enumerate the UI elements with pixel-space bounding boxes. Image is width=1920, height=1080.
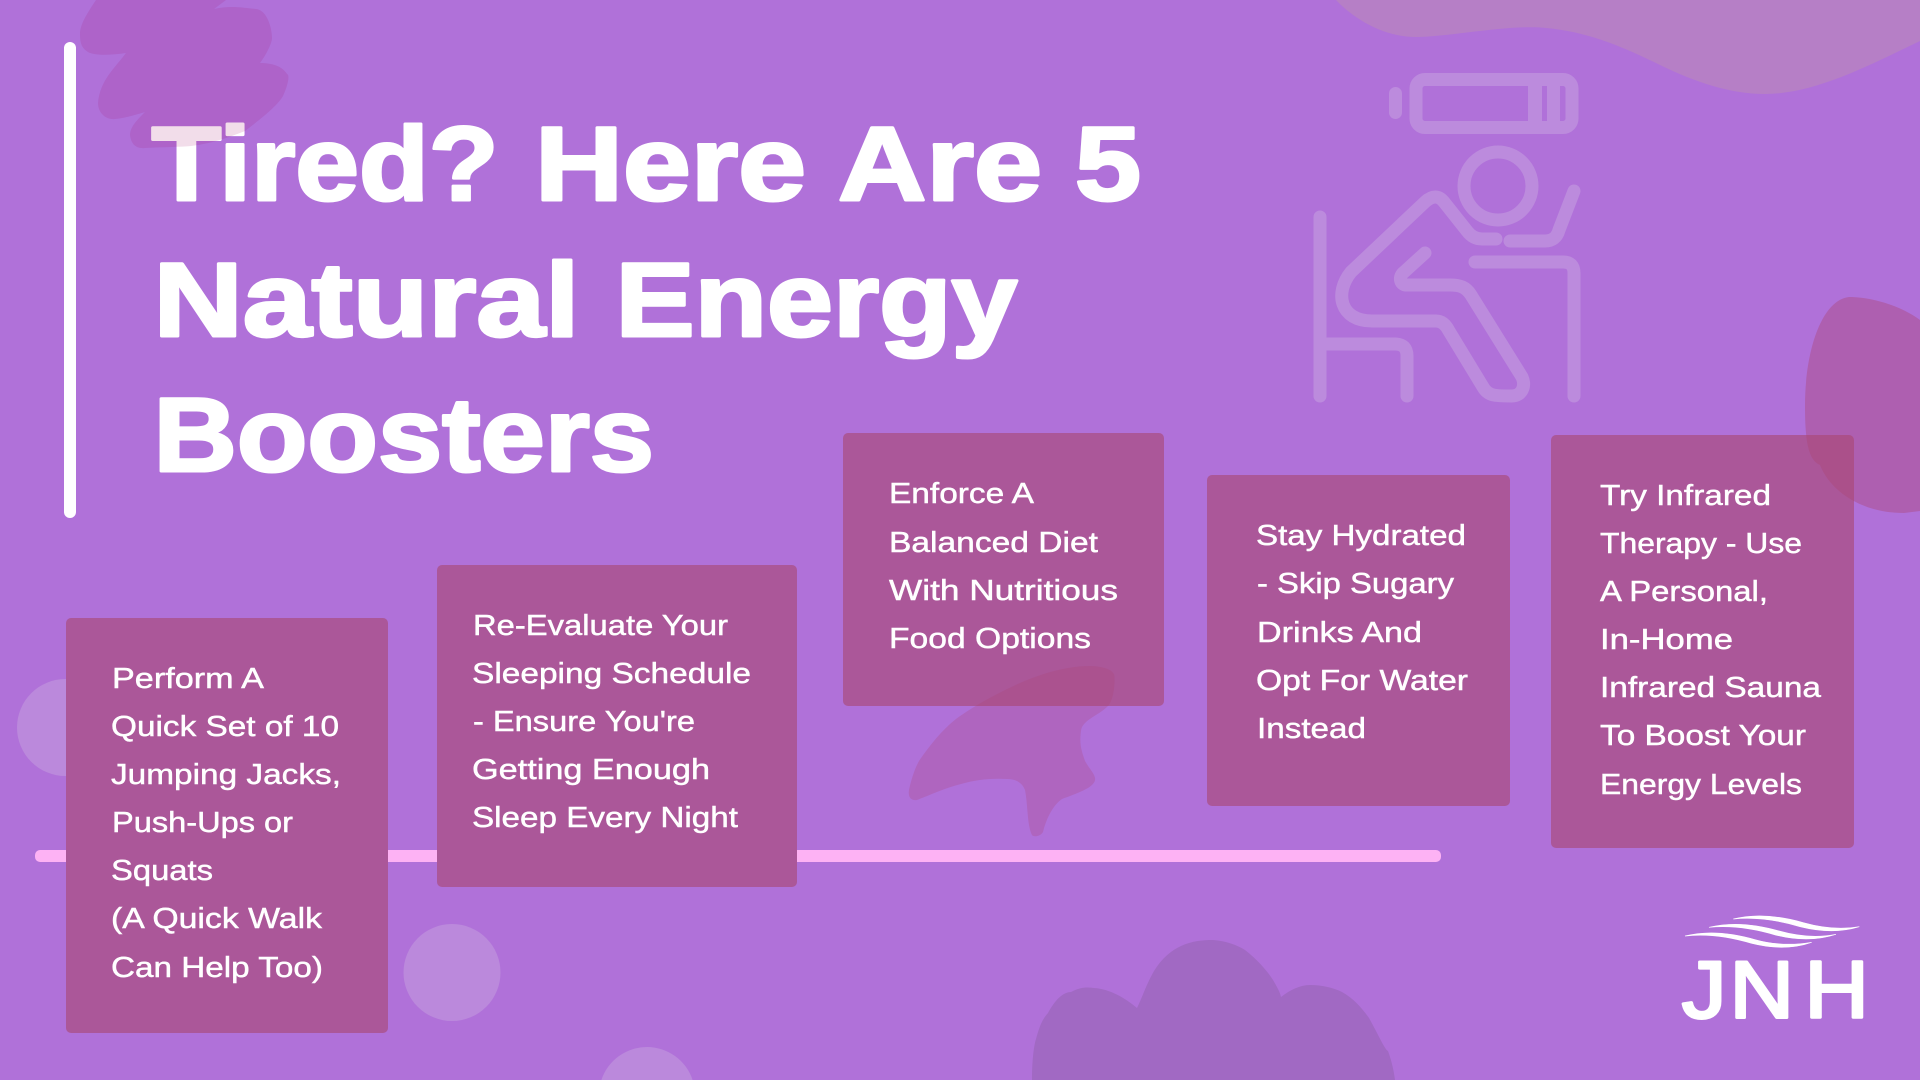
circle: bottom xyxy=(601,1047,693,1080)
panel: card 5: Infrared Sauna xyxy=(1600,672,1822,704)
blob: bottom xyxy=(1032,940,1395,1080)
title xyxy=(152,106,1141,494)
title: Natural xyxy=(154,242,580,359)
title: 5 xyxy=(1075,106,1141,223)
title: Here xyxy=(535,106,806,223)
title: Tired? xyxy=(152,106,498,223)
panel: card 1: Quick Set of 10 xyxy=(111,711,339,743)
timeline line xyxy=(35,850,1441,862)
panel: card 2: Getting Enough xyxy=(472,754,710,786)
panel: card 3: Enforce A xyxy=(889,478,1035,510)
panel: card 2: Sleep Every Night xyxy=(472,802,738,834)
panel: card 1: Can Help Too) xyxy=(111,952,323,984)
panel: card 4: Stay Hydrated xyxy=(1256,520,1466,552)
panel: card 1 xyxy=(66,618,388,1033)
panel: card 1: Perform A xyxy=(112,663,265,695)
panel: card 3: With Nutritious xyxy=(889,575,1118,607)
panel: card 5 xyxy=(1551,435,1854,848)
blob: top left, over title xyxy=(80,0,288,148)
panel: card 5: Try Infrared xyxy=(1600,480,1771,512)
panel: card 2 xyxy=(437,565,797,887)
panel: card 3: Balanced Diet xyxy=(889,527,1098,559)
panel: card 2: Sleeping Schedule xyxy=(472,658,751,690)
panel: card 5: Energy Levels xyxy=(1600,769,1802,801)
panel: card 5: A Personal, xyxy=(1600,576,1768,608)
title: Energy xyxy=(616,242,1018,359)
title: Are xyxy=(838,106,1042,223)
panel: card 1: Squats xyxy=(111,855,213,887)
panel: card 4 xyxy=(1207,475,1510,806)
panel: card 4: Opt For Water xyxy=(1256,665,1468,697)
panel: card 3: Food Options xyxy=(889,623,1091,655)
panel: card 3 xyxy=(843,433,1164,706)
title: Boosters xyxy=(154,377,654,494)
icon: tired person at desk with low battery xyxy=(1320,79,1574,396)
panel: card 1: (A Quick Walk xyxy=(111,903,323,935)
panel: card 5: To Boost Your xyxy=(1600,720,1806,752)
panel: card 1: Push-Ups or xyxy=(112,807,293,839)
panel: card 5: In-Home xyxy=(1600,624,1733,656)
panel: card 4: Drinks And xyxy=(1257,617,1422,649)
panel: card 2: - Ensure You're xyxy=(473,706,695,738)
blob: top right xyxy=(1336,0,1920,94)
logo: JNH: JNH xyxy=(1682,945,1869,1036)
panel: card 4: Instead xyxy=(1257,713,1366,745)
title accent bar xyxy=(64,42,76,518)
panel: card 5: Therapy - Use xyxy=(1600,528,1802,560)
blob: right, over card 5 xyxy=(1805,297,1920,513)
panel: card 1: Jumping Jacks, xyxy=(111,759,341,791)
panel: card 2: Re-Evaluate Your xyxy=(473,610,728,642)
circle: lower middle xyxy=(404,924,500,1021)
blob: middle, over card 3 xyxy=(909,666,1115,836)
panel: card 4: - Skip Sugary xyxy=(1257,568,1455,600)
circle: left xyxy=(17,679,114,776)
